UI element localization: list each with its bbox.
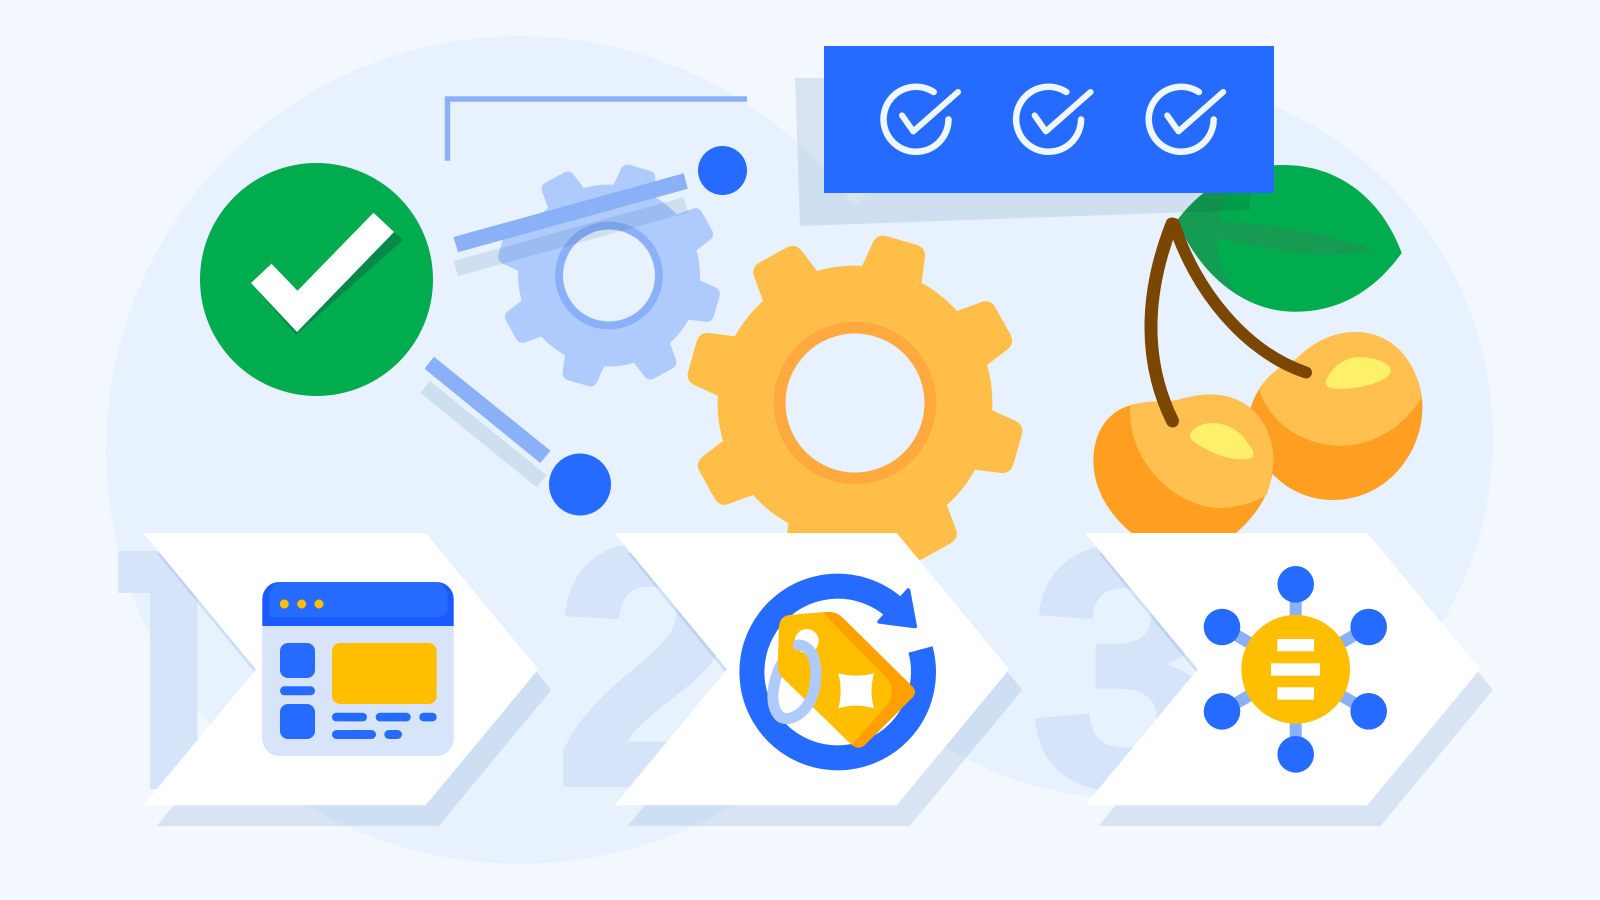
checklist banner shadow [795,78,1250,226]
step numbers [73,476,1220,862]
icon: refresh price tag [752,586,924,758]
right cherry [1249,332,1422,500]
check icon 1 [884,87,958,152]
number 3: 3 [1031,478,1220,858]
infographic canvas [106,36,1493,864]
leaf [1177,165,1402,312]
corner bracket [448,99,747,161]
checklist banner [824,46,1274,193]
refresh arrow [752,586,924,758]
check icon 3 [1149,87,1223,152]
tag string back [773,663,782,717]
connector: upper line with dot [454,146,747,276]
number 1 [118,551,198,789]
chevron panel 2 [614,533,1022,826]
number 2: 2 [555,476,744,856]
tag string front [780,645,816,719]
icon: network hub [1204,566,1387,773]
background blob [106,36,1493,864]
connector: lower line with dot [420,357,611,516]
icon: green check badge [200,163,433,396]
check icon 2 [1016,87,1091,152]
number 1: 1 [73,482,262,862]
left cherry [1093,395,1274,545]
icon: browser window [262,582,454,756]
icon: cherries with leaf [1093,165,1422,545]
price tag [778,612,915,748]
chevron panel 1 [143,533,551,826]
chevron panel 3 [1085,533,1493,826]
stems [1151,224,1306,421]
icon: large yellow gear [684,232,1026,574]
icon: small blue gear [496,162,722,389]
